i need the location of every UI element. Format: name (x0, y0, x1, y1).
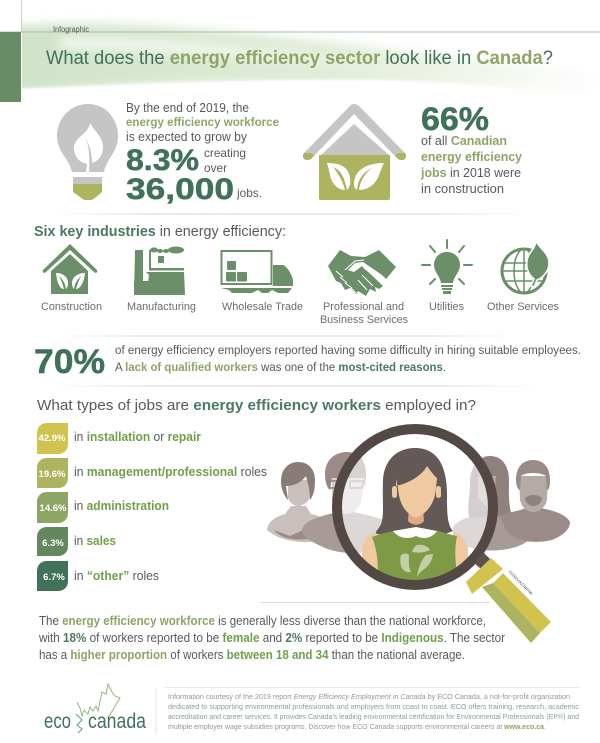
person: right man (500, 460, 570, 542)
item: other: 6.7% (43, 572, 65, 583)
job type list (37, 423, 267, 591)
text block: workforce diversity (38, 613, 506, 662)
footer credits: multiple employer wage subsidies programs. Discover how ECO Canada supports environmental careers at www.eco.ca. (168, 722, 546, 731)
industries icon row (43, 240, 549, 296)
item: management: in management/professional roles (74, 465, 267, 479)
text block: workforce growth: 36,000 (126, 173, 234, 206)
person: man with glasses (302, 452, 392, 553)
text block: 66 percent construction: of all Canadian (421, 133, 507, 148)
heading: job types: What types of jobs are energy efficiency workers employed in? (37, 397, 476, 414)
item: management: 19.6% (39, 469, 66, 480)
item: administration (37, 492, 169, 523)
icon: light bulb with leaf (57, 104, 118, 200)
header rule lines (0, 0, 600, 32)
item: sales (37, 527, 116, 556)
industry labels: Construction (41, 301, 102, 313)
stat: 70 percent hiring difficulty: of energy efficiency employers reported having some difficulty in hiring suitable employees. (115, 343, 581, 357)
item: administration: in administration (74, 499, 169, 513)
text block: 66 percent construction: energy efficiency (421, 149, 523, 164)
stat: 70 percent hiring difficulty: A lack of qualified workers was one of the most-cited reasons. (115, 360, 446, 374)
industry labels: Business Services (320, 314, 408, 326)
logo: ECO Canada: canada (88, 710, 146, 733)
industry labels: Other Services (487, 301, 559, 313)
icon: wholesale truck (221, 251, 293, 293)
text block: 66 percent construction: 66% (421, 101, 489, 137)
item: installation or repair: 42.9% (39, 433, 66, 444)
footer credits (168, 692, 579, 731)
text block: 66 percent construction (420, 101, 523, 196)
heading: six key industries: Six key industries in energy efficiency: (34, 223, 286, 240)
text block: workforce growth: creating (204, 146, 246, 160)
icon: manufacturing (134, 246, 185, 295)
item: sales: in sales (74, 534, 116, 548)
icon: house with leaves (303, 104, 406, 200)
person: left woman (267, 462, 332, 542)
item: other (37, 561, 159, 591)
section tag: Infographic (53, 25, 89, 34)
industry labels: Manufacturing (127, 301, 196, 313)
item: administration: 14.6% (40, 503, 67, 514)
icon: construction (43, 244, 97, 294)
item: installation or repair: in installation or repair (74, 430, 201, 444)
footer credits: Information courtesy of the 2019 report Energy Efficiency Employment in Canada by ECO Canada, a not-for-profit organization (168, 692, 570, 701)
item: other: in “other” roles (74, 569, 159, 583)
text block: workforce growth: energy efficiency workforce (126, 115, 279, 129)
lens contents: woman (337, 429, 493, 590)
text block: workforce diversity: The energy efficiency workforce is generally less diverse than the national workforce, (39, 613, 486, 628)
industry labels: Professional and (323, 301, 404, 313)
header green tab (0, 32, 21, 102)
logo: ECO Canada (44, 684, 146, 733)
text block: workforce growth (126, 101, 279, 206)
text block: 66 percent construction: jobs in 2018 were (420, 165, 521, 180)
text block: workforce growth: over (204, 161, 227, 175)
stat: 70 percent hiring difficulty: 70% (34, 343, 105, 381)
text block: workforce diversity: has a higher proportion of workers between 18 and 34 than the national average. (39, 647, 465, 662)
text block: workforce growth: jobs. (236, 186, 262, 200)
title: What does the energy efficiency sector look like in Canada? (46, 48, 553, 69)
item: management (37, 458, 267, 488)
text block: workforce diversity: with 18% of workers reported to be female and 2% reported to be Indigenous. The sector (38, 630, 506, 645)
person: right woman (453, 456, 529, 551)
footer credits: dedicated to supporting environmental professionals and employers from coast to coast. ECO offers training, research, academic (168, 702, 579, 711)
logo: ECO Canada: eco (44, 710, 71, 733)
text block: workforce growth: By the end of 2019, the (126, 101, 249, 115)
illustration: workers under magnifying glass (267, 429, 570, 643)
item: installation or repair (37, 423, 201, 454)
industry labels (41, 301, 559, 326)
text block: workforce growth: 8.3% (126, 144, 199, 177)
icon: globe with leaf (502, 241, 549, 293)
photo credit: ©iStock/Jamie (507, 568, 535, 596)
item: sales: 6.3% (42, 538, 64, 549)
header band swoosh (22, 19, 553, 90)
stat: 70 percent hiring difficulty (34, 343, 581, 381)
text block: workforce growth: is expected to grow by (126, 130, 248, 144)
industry labels: Utilities (429, 301, 464, 313)
magnifier handle (466, 552, 551, 643)
icon: handshake (328, 250, 396, 296)
icon: utilities bulb (422, 240, 472, 294)
text block: 66 percent construction: in construction (421, 181, 504, 196)
industry labels: Wholesale Trade (222, 301, 303, 313)
